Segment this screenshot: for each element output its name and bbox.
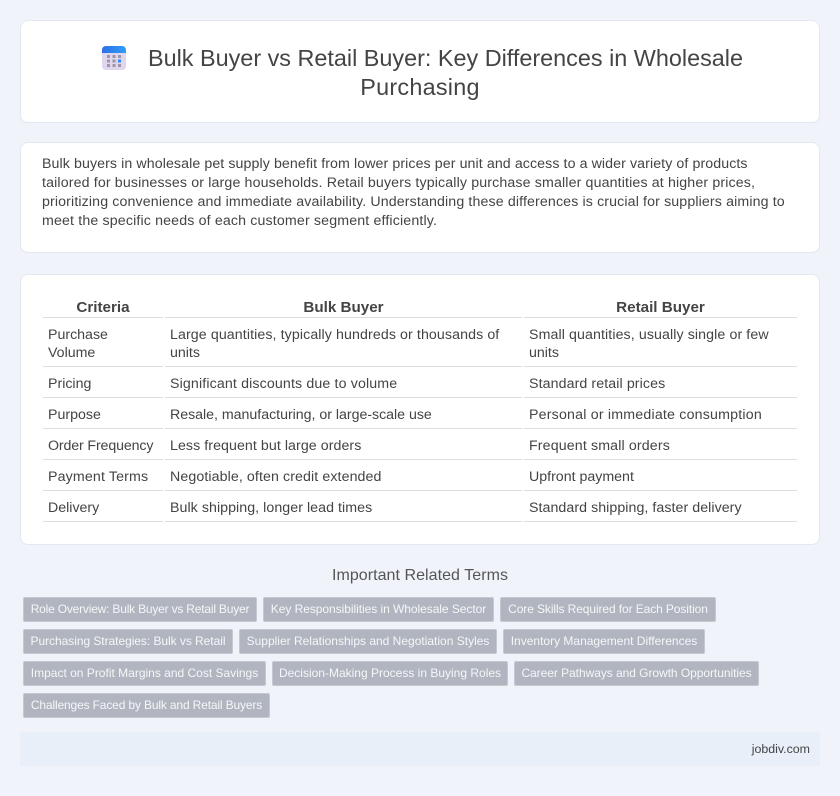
text block: summary: Bulk buyers in wholesale pet supply benefit from lower prices per unit and access to a wider variety of products bbox=[42, 156, 748, 172]
table row: purchase volume: Small quantities, usually single or few bbox=[529, 327, 769, 343]
title: Bulk Buyer vs Retail Buyer: Key Differences in Wholesale bbox=[148, 45, 743, 71]
tag group: related terms: Role Overview: Bulk Buyer vs Retail Buyer bbox=[31, 602, 249, 616]
tag group: related terms: Key Responsibilities in Wholesale Sector bbox=[271, 602, 486, 616]
panel: summary bbox=[20, 142, 820, 253]
text block: summary: meet the specific needs of each customer segment efficiently. bbox=[42, 213, 437, 229]
heading: related terms: Important Related Terms bbox=[332, 567, 508, 584]
tag group: related terms: Inventory Management Differences bbox=[511, 634, 697, 648]
table row: payment terms: Payment Terms bbox=[48, 469, 148, 485]
table row: pricing: Pricing bbox=[48, 376, 91, 392]
table row: delivery: Delivery bbox=[48, 500, 99, 516]
tag group: related terms: Core Skills Required for Each Position bbox=[508, 602, 708, 616]
title bbox=[148, 45, 743, 100]
table row: pricing: Standard retail prices bbox=[529, 376, 665, 392]
tag group: related terms: Purchasing Strategies: Bulk vs Retail bbox=[31, 634, 225, 648]
table row: purpose: Purpose bbox=[48, 407, 101, 423]
icon: calendar bbox=[102, 46, 126, 70]
table row: delivery: Bulk shipping, longer lead times bbox=[170, 500, 372, 516]
table row: order frequency: Order Frequency bbox=[48, 438, 153, 454]
tag group: related terms: Decision-Making Process in Buying Roles bbox=[279, 666, 501, 680]
table row: order frequency: Less frequent but large orders bbox=[170, 438, 361, 454]
table header bbox=[76, 299, 705, 316]
table row: purchase volume: Large quantities, typically hundreds or thousands of bbox=[170, 327, 499, 343]
table row: purchase volume bbox=[48, 327, 769, 361]
panel: comparison table bbox=[20, 274, 820, 545]
table row: delivery: Standard shipping, faster delivery bbox=[529, 500, 742, 516]
table row: purpose: Personal or immediate consumption bbox=[529, 407, 762, 423]
panel: header bbox=[20, 20, 820, 123]
title: Purchasing bbox=[360, 74, 480, 100]
footer bar bbox=[20, 732, 820, 766]
table row: payment terms: Negotiable, often credit extended bbox=[170, 469, 382, 485]
tag group: related terms: Supplier Relationships and Negotiation Styles bbox=[247, 634, 489, 648]
text block: summary: tailored for businesses or large households. Retail buyers typically purchase smaller quantities at higher prices, bbox=[42, 175, 755, 191]
tag group: related terms: Impact on Profit Margins and Cost Savings bbox=[31, 666, 258, 680]
table row: purchase volume: units bbox=[170, 345, 200, 361]
table row: purpose: Resale, manufacturing, or large-scale use bbox=[170, 407, 432, 423]
table row: purchase volume: Purchase bbox=[48, 327, 108, 343]
table header: Criteria bbox=[76, 299, 130, 316]
text block: summary: prioritizing convenience and immediate availability. Understanding these differences is crucial for suppliers aiming to bbox=[42, 194, 785, 210]
table row: delivery bbox=[48, 500, 742, 516]
table row: pricing: Significant discounts due to volume bbox=[170, 376, 397, 392]
table header: Bulk Buyer bbox=[303, 299, 384, 316]
table row: purchase volume: units bbox=[529, 345, 559, 361]
table row: payment terms bbox=[48, 469, 634, 485]
table row: payment terms: Upfront payment bbox=[529, 469, 634, 485]
tag group: related terms: Career Pathways and Growth Opportunities bbox=[521, 666, 752, 680]
footer credit: jobdiv.com bbox=[752, 742, 810, 756]
table row: pricing bbox=[48, 376, 665, 392]
tag group: related terms bbox=[23, 597, 759, 718]
table row: order frequency bbox=[48, 438, 670, 454]
table row: purpose bbox=[48, 407, 762, 423]
table row: purchase volume: Volume bbox=[48, 345, 95, 361]
table row: order frequency: Frequent small orders bbox=[529, 438, 670, 454]
table header: Retail Buyer bbox=[616, 299, 705, 316]
text block: summary bbox=[42, 156, 785, 229]
tag group: related terms: Challenges Faced by Bulk and Retail Buyers bbox=[31, 698, 262, 712]
